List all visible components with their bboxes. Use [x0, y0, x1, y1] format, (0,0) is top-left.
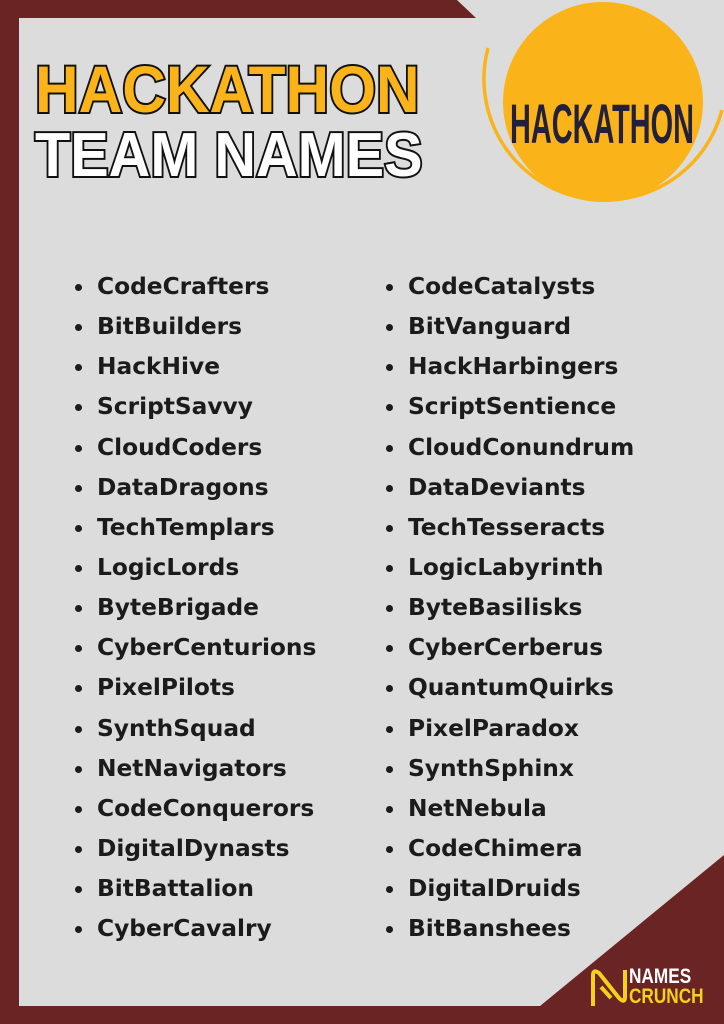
- title: [34, 52, 423, 190]
- list: left column: DataDragons: [97, 474, 269, 501]
- list: left column: NetNavigators: [97, 755, 287, 782]
- list: left column: CyberCenturions: [97, 634, 316, 661]
- list: right column: DigitalDruids: [408, 875, 581, 902]
- list: right column: CodeChimera: [408, 835, 583, 862]
- list: right column: CodeCatalysts: [408, 273, 595, 300]
- list: right column: TechTesseracts: [408, 514, 605, 541]
- list: right column: [386, 273, 634, 942]
- list: right column: ScriptSentience: [408, 393, 616, 420]
- list: left column: ByteBrigade: [97, 594, 259, 621]
- list: left column: SynthSquad: [97, 715, 256, 742]
- logo: names crunch: NAMES: [629, 965, 691, 988]
- list: right column: CloudConundrum: [408, 434, 634, 461]
- list: right column: BitBanshees: [408, 915, 571, 942]
- list: left column: BitBuilders: [97, 313, 242, 340]
- list: left column: [75, 273, 316, 942]
- list: right column: ByteBasilisks: [408, 594, 582, 621]
- list: left column: CodeCrafters: [97, 273, 269, 300]
- title: HACKATHON: [35, 52, 420, 126]
- list: right column: NetNebula: [408, 795, 547, 822]
- list: left column: PixelPilots: [97, 674, 235, 701]
- list: left column: BitBattalion: [97, 875, 254, 902]
- logo: names crunch: [591, 965, 704, 1008]
- list: right column: PixelParadox: [408, 715, 579, 742]
- logo: names crunch: CRUNCH: [629, 985, 704, 1008]
- list: left column: LogicLords: [97, 554, 239, 581]
- icon: hackathon circle: [484, 2, 722, 202]
- list: right column: CyberCerberus: [408, 634, 603, 661]
- list: left column: CyberCavalry: [97, 915, 272, 942]
- list: right column: QuantumQuirks: [408, 674, 614, 701]
- list: left column: CloudCoders: [97, 434, 262, 461]
- list: right column: LogicLabyrinth: [408, 554, 604, 581]
- title: TEAM NAMES: [35, 121, 423, 190]
- list: left column: HackHive: [97, 353, 220, 380]
- list: left column: DigitalDynasts: [97, 835, 290, 862]
- list: left column: CodeConquerors: [97, 795, 314, 822]
- list: left column: ScriptSavvy: [97, 393, 253, 420]
- list: right column: HackHarbingers: [408, 353, 618, 380]
- list: right column: DataDeviants: [408, 474, 586, 501]
- list: right column: SynthSphinx: [408, 755, 574, 782]
- list: right column: BitVanguard: [408, 313, 571, 340]
- list: left column: TechTemplars: [97, 514, 275, 541]
